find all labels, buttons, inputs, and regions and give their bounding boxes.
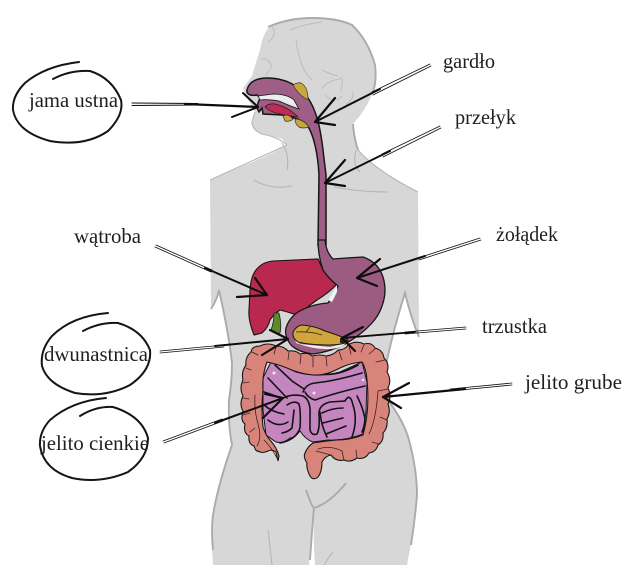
arrow: przełyk xyxy=(325,126,441,186)
arrow: jama ustna xyxy=(132,93,258,117)
callout: jama ustna: jama ustna xyxy=(28,88,119,112)
label: trzustka: trzustka xyxy=(482,314,548,338)
small intestine xyxy=(263,362,367,443)
callout: jelito cienkie xyxy=(40,398,149,480)
arrow: jelito grube xyxy=(383,383,512,408)
callout: jelito cienkie: jelito cienkie xyxy=(40,431,149,455)
gap between liver and stomach xyxy=(328,285,337,302)
callout: dwunastnica xyxy=(42,313,150,394)
pointer arrows xyxy=(132,64,512,443)
arrow: dwunastnica xyxy=(160,330,288,355)
pancreas xyxy=(293,325,349,349)
arrow: jelito cienkie xyxy=(163,394,283,443)
callout: jama ustna xyxy=(13,62,121,143)
human body silhouette xyxy=(210,18,419,565)
large intestine xyxy=(241,342,390,479)
stomach xyxy=(286,240,385,354)
arrow: trzustka xyxy=(342,327,466,351)
callout: dwunastnica: dwunastnica xyxy=(44,342,149,366)
gallbladder xyxy=(271,313,281,333)
label: przełyk: przełyk xyxy=(455,105,516,129)
label: wątroba: wątroba xyxy=(74,224,142,248)
label: gardło: gardło xyxy=(443,49,495,73)
salivary glands xyxy=(283,83,309,128)
mouth, pharynx and esophagus xyxy=(247,78,326,245)
label: jelito grube: jelito grube xyxy=(524,370,622,394)
arrow: gardło xyxy=(315,64,431,125)
label: żołądek: żołądek xyxy=(496,222,558,246)
arrow: wątroba xyxy=(155,245,267,297)
liver xyxy=(249,259,337,335)
arrow: żółądek xyxy=(357,238,481,286)
